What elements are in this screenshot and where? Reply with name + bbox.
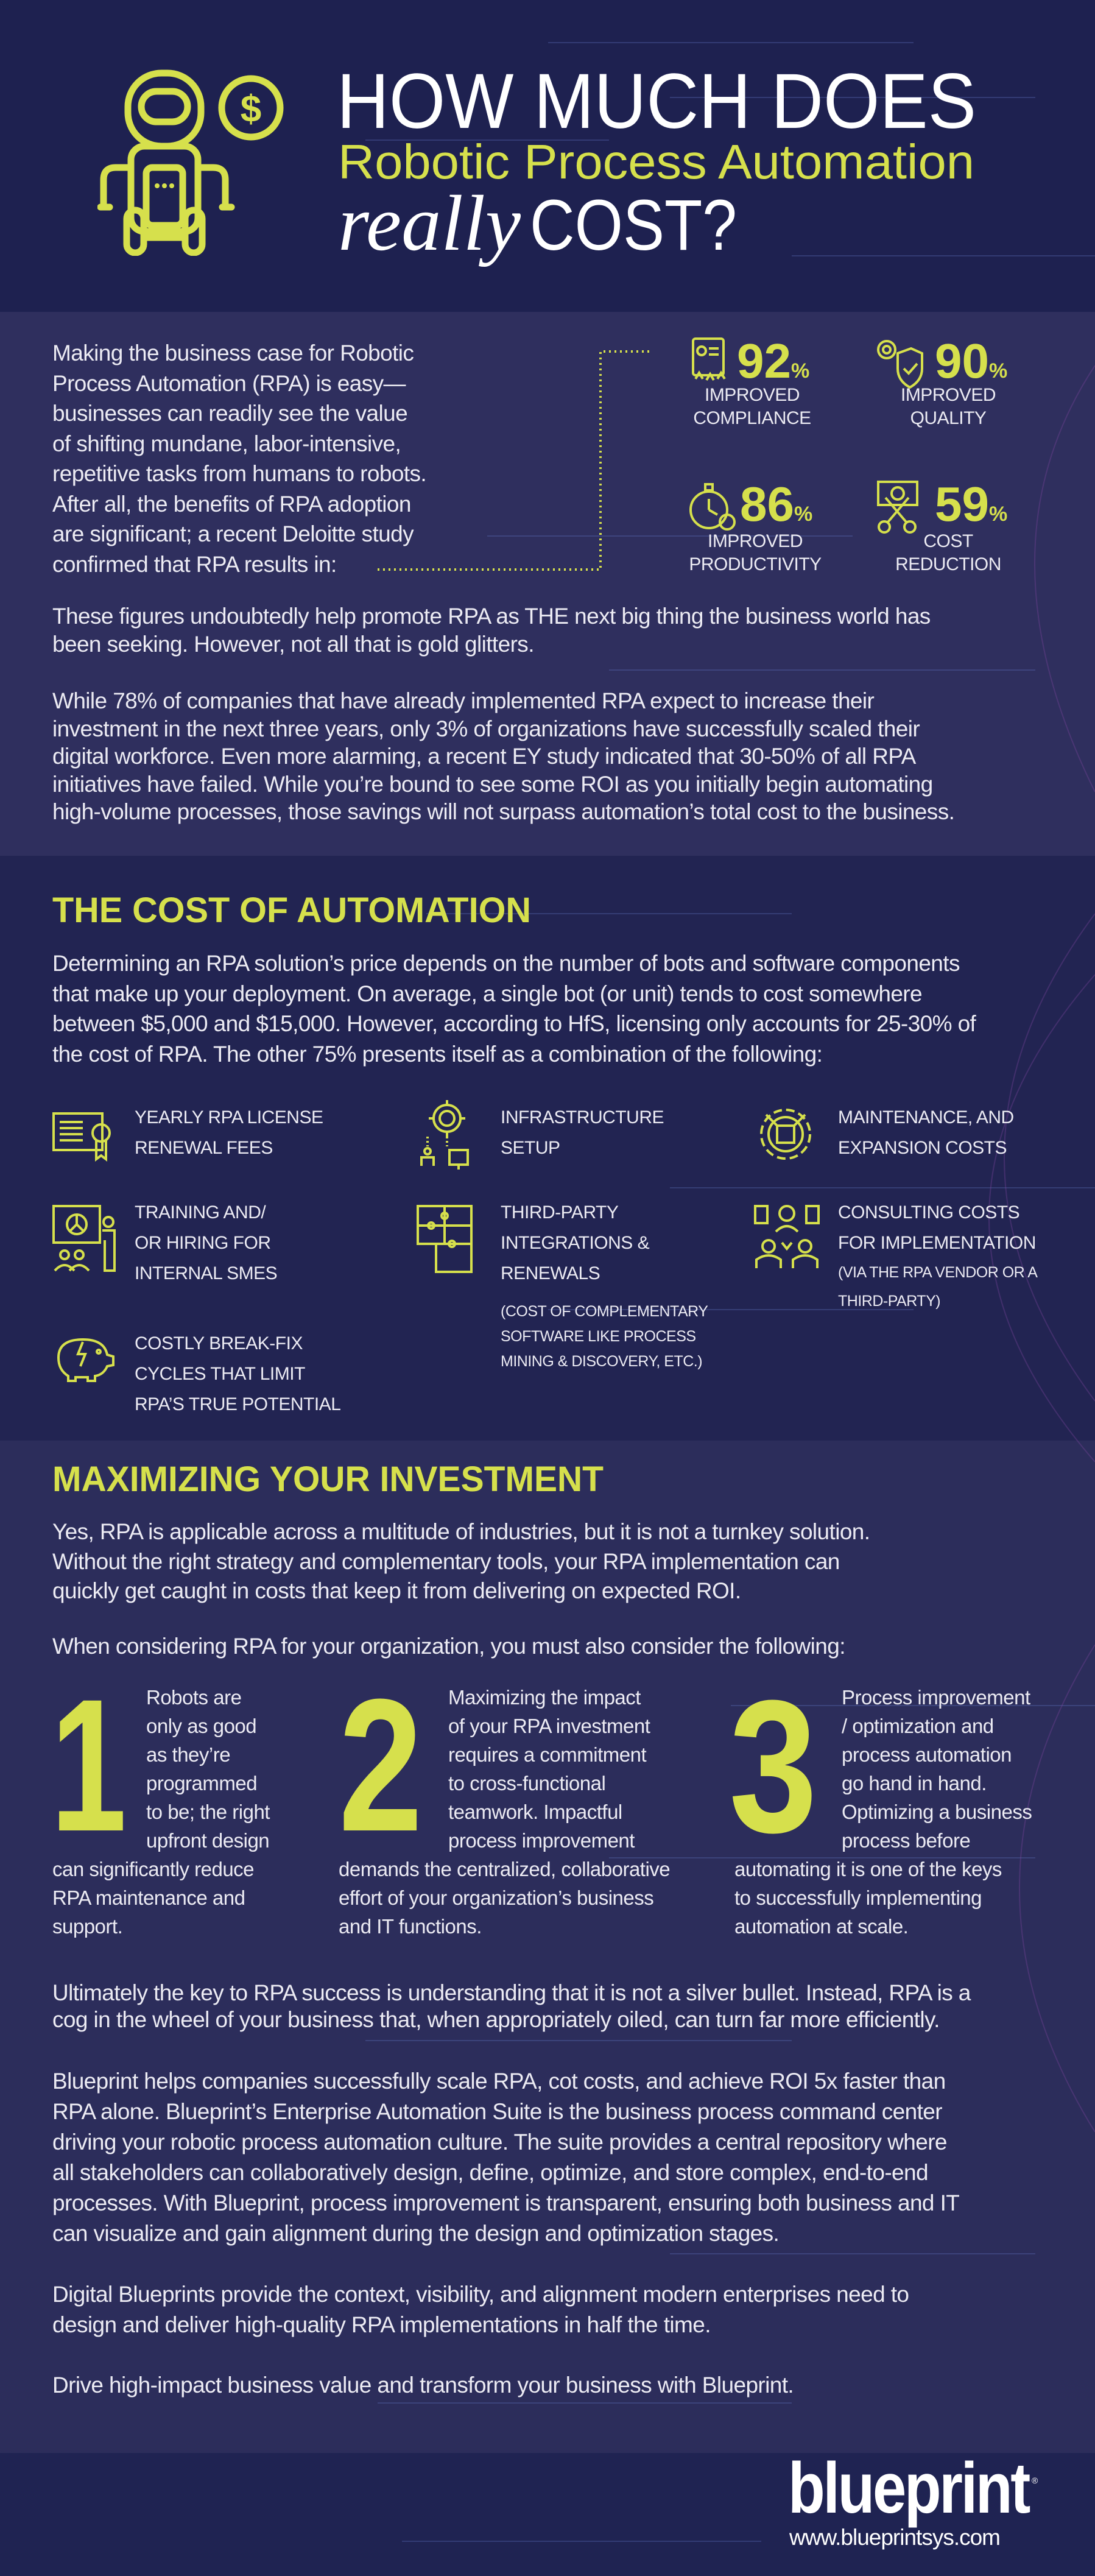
cost item: third-party integrations: RENEWALS <box>501 1263 600 1283</box>
cost item: training <box>52 1202 277 1283</box>
cost item: infrastructure: INFRASTRUCTURE <box>501 1107 664 1127</box>
paragraph: blueprint helps: processes. With Blueprint, process improvement is transparent, ensuring both business and IT <box>52 2190 959 2215</box>
point 2: effort of your organization’s business <box>339 1886 653 1909</box>
cost item: consulting: FOR IMPLEMENTATION <box>838 1233 1036 1253</box>
point 3: automation at scale. <box>734 1915 908 1938</box>
paragraph: these figures: These figures undoubtedly help promote RPA as THE next big thing the business world has <box>52 604 931 629</box>
cost item: third-party integrations: (COST OF COMPLEMENTARY <box>501 1303 708 1320</box>
paragraph: digital blueprints: design and deliver high-quality RPA implementations in half the time. <box>52 2312 711 2337</box>
cost item: training: INTERNAL SMES <box>135 1263 277 1283</box>
point 1 <box>51 1686 270 1938</box>
paragraph: 78% of companies: While 78% of companies that have already implemented RPA expect to increase their <box>52 688 874 713</box>
cost item: license fees <box>52 1107 323 1162</box>
paragraph: ultimately: Ultimately the key to RPA success is understanding that it is not a silver bullet. Instead, RPA is a <box>52 1980 971 2005</box>
paragraph: turnkey <box>52 1519 870 1603</box>
cost item: third-party integrations: THIRD-PARTY <box>501 1202 618 1223</box>
point 3: process automation <box>842 1743 1012 1766</box>
intro paragraph: Process Automation (RPA) is easy— <box>52 370 406 396</box>
cost item: maintenance <box>760 1107 1014 1160</box>
point 2: and IT functions. <box>339 1915 482 1938</box>
intro paragraph: Making the business case for Robotic <box>52 341 414 365</box>
heading: maximizing your investment: MAXIMIZING YOUR INVESTMENT <box>52 1459 604 1498</box>
cost item: third-party integrations: MINING & DISCOVERY, ETC.) <box>501 1353 702 1370</box>
cost item: license fees: RENEWAL FEES <box>135 1138 273 1158</box>
paragraph: blueprint helps: all stakeholders can collaboratively design, define, optimize, and store complex, end-to-end <box>52 2160 928 2185</box>
cost item: consulting <box>754 1202 1038 1310</box>
icon: robot with dollar coin: $ <box>241 88 261 130</box>
point 3: go hand in hand. <box>842 1772 987 1794</box>
intro paragraph: are significant; a recent Deloitte study <box>52 521 414 546</box>
footer logo: www.blueprintsys.com <box>789 2525 1000 2550</box>
paragraph: 78% of companies: high-volume processes, those savings will not surpass automation’s total cost to the business. <box>52 799 954 824</box>
paragraph: ultimately <box>52 1980 971 2032</box>
cost item: maintenance: EXPANSION COSTS <box>838 1138 1007 1158</box>
paragraph: blueprint helps: driving your robotic process automation culture. The suite provides a central repository where <box>52 2130 947 2154</box>
paragraph: 78% of companies: digital workforce. Even more alarming, a recent EY study indicated that 30-50% of all RPA <box>52 744 916 769</box>
cost item: break-fix: RPA’S TRUE POTENTIAL <box>135 1394 340 1414</box>
point 1: to be; the right <box>146 1801 270 1823</box>
paragraph: when considering: When considering RPA for your organization, you must also consider the following: <box>52 1634 845 1659</box>
stat: 90% improved quality: IMPROVED <box>901 385 996 405</box>
point 3: automating it is one of the keys <box>734 1858 1002 1880</box>
paragraph: determining price: that make up your deployment. On average, a single bot (or unit) tends to cost somewhere <box>52 981 922 1006</box>
intro paragraph: After all, the benefits of RPA adoption <box>52 491 411 517</box>
cost item: consulting: THIRD-PARTY) <box>838 1293 940 1310</box>
title: COST? <box>530 185 737 266</box>
paragraph: these figures <box>52 604 931 657</box>
cost item: third-party integrations: SOFTWARE LIKE PROCESS <box>501 1328 696 1345</box>
cost item: consulting: CONSULTING COSTS <box>838 1202 1019 1223</box>
cost item: break-fix <box>57 1333 340 1414</box>
cost item: third-party integrations <box>417 1202 708 1370</box>
paragraph: drive: Drive high-impact business value and transform your business with Blueprint. <box>52 2373 794 2398</box>
point 2: process improvement <box>448 1829 635 1852</box>
point 1: upfront design <box>146 1829 269 1852</box>
heading: the cost of automation: THE COST OF AUTOMATION <box>52 891 531 930</box>
point 3: Optimizing a business <box>842 1801 1032 1823</box>
paragraph: determining price: Determining an RPA solution’s price depends on the number of bots and software components <box>52 951 960 976</box>
cost item: training: OR HIRING FOR <box>135 1233 270 1253</box>
paragraph: these figures: been seeking. However, not all that is gold glitters. <box>52 632 534 657</box>
point 2: Maximizing the impact <box>448 1686 641 1709</box>
stat: 86% improved productivity <box>689 477 822 574</box>
paragraph: determining price <box>52 951 976 1066</box>
cost item: maintenance: MAINTENANCE, AND <box>838 1107 1014 1127</box>
stat: 59% cost reduction: COST <box>923 531 973 551</box>
point 3 <box>729 1686 1032 1938</box>
paragraph: turnkey: quickly get caught in costs that keep it from delivering on expected ROI. <box>52 1578 741 1603</box>
intro paragraph: businesses can readily see the value <box>52 401 407 426</box>
cost item: infrastructure <box>420 1100 664 1170</box>
paragraph: determining price: the cost of RPA. The other 75% presents itself as a combination of the following: <box>52 1042 822 1066</box>
point 2: to cross-functional <box>448 1772 605 1794</box>
cost item: infrastructure: SETUP <box>501 1138 560 1158</box>
point 3: to successfully implementing <box>734 1886 982 1909</box>
paragraph: 78% of companies: investment in the next three years, only 3% of organizations have successfully scaled their <box>52 716 920 741</box>
stat: 90% improved quality <box>877 334 1007 428</box>
point 2: demands the centralized, collaborative <box>339 1858 670 1880</box>
paragraph: determining price: between $5,000 and $15,000. However, according to HfS, licensing only accounts for 25-30% of <box>52 1011 976 1036</box>
point 1: RPA maintenance and <box>52 1886 245 1909</box>
stat: 92% improved compliance: IMPROVED <box>705 385 800 405</box>
paragraph: ultimately: cog in the wheel of your business that, when appropriately oiled, can turn far more efficiently. <box>52 2007 940 2032</box>
dotted connector <box>378 350 649 571</box>
paragraph: 78% of companies <box>52 688 954 824</box>
point 1: Robots are <box>146 1686 241 1709</box>
stat: 59% cost reduction <box>877 477 1007 574</box>
stat: 59% cost reduction: REDUCTION <box>895 554 1001 574</box>
cost item: license fees: YEARLY RPA LICENSE <box>135 1107 323 1127</box>
point 3: process before <box>842 1829 970 1852</box>
intro paragraph: repetitive tasks from humans to robots. <box>52 461 426 486</box>
point 3: / optimization and <box>842 1715 994 1737</box>
paragraph: 78% of companies: initiatives have failed. While you’re bound to see some ROI as you initially begin automating <box>52 771 933 797</box>
stat: 86% improved productivity: 86% <box>740 477 812 531</box>
intro paragraph <box>52 341 426 576</box>
point 2: of your RPA investment <box>448 1715 650 1737</box>
point 1: as they’re <box>146 1743 230 1766</box>
point 3: Process improvement <box>842 1686 1030 1709</box>
stat: 86% improved productivity: IMPROVED <box>708 531 803 551</box>
cost item: break-fix: CYCLES THAT LIMIT <box>135 1364 305 1384</box>
point 1: programmed <box>146 1772 257 1794</box>
paragraph: blueprint helps: can visualize and gain alignment during the design and optimization stages. <box>52 2221 779 2246</box>
paragraph: blueprint helps: RPA alone. Blueprint’s Enterprise Automation Suite is the business process command center <box>52 2099 942 2124</box>
title: really <box>338 180 521 267</box>
stat: 59% cost reduction: 59% <box>935 477 1007 531</box>
point 2: requires a commitment <box>448 1743 646 1766</box>
stat: 86% improved productivity: PRODUCTIVITY <box>689 554 822 574</box>
footer logo: ® <box>1032 2475 1038 2485</box>
point 1: only as good <box>146 1715 256 1737</box>
paragraph: digital blueprints <box>52 2282 909 2337</box>
intro paragraph: confirmed that RPA results in: <box>52 552 337 576</box>
title: Robotic Process Automation <box>338 135 974 189</box>
paragraph: turnkey: Without the right strategy and complementary tools, your RPA implementation can <box>52 1548 840 1574</box>
stat: 92% improved compliance <box>692 334 811 428</box>
paragraph: blueprint helps <box>52 2069 959 2246</box>
cost item: consulting: (VIA THE RPA VENDOR OR A <box>838 1264 1037 1281</box>
paragraph: blueprint helps: Blueprint helps companies successfully scale RPA, cot costs, and achieve ROI 5x faster than <box>52 2069 946 2094</box>
icon: robot with dollar coin <box>97 69 284 256</box>
intro paragraph: of shifting mundane, labor-intensive, <box>52 431 401 456</box>
stat: 92% improved compliance: 92% <box>737 334 809 388</box>
title <box>337 61 976 267</box>
stat: 92% improved compliance: COMPLIANCE <box>693 408 811 428</box>
cost item: third-party integrations: INTEGRATIONS & <box>501 1233 649 1253</box>
stat: 90% improved quality: QUALITY <box>910 408 986 428</box>
point 2: teamwork. Impactful <box>448 1801 622 1823</box>
point 2 <box>339 1686 670 1938</box>
paragraph: turnkey: Yes, RPA is applicable across a multitude of industries, but it is not a turnkey solution. <box>52 1519 870 1544</box>
stat: 90% improved quality: 90% <box>935 334 1007 388</box>
cost item: training: TRAINING AND/ <box>135 1202 266 1223</box>
cost item: break-fix: COSTLY BREAK-FIX <box>135 1333 303 1353</box>
paragraph: digital blueprints: Digital Blueprints provide the context, visibility, and alignment modern enterprises need to <box>52 2282 909 2307</box>
point 1: can significantly reduce <box>52 1858 254 1880</box>
point 1: support. <box>52 1915 122 1938</box>
